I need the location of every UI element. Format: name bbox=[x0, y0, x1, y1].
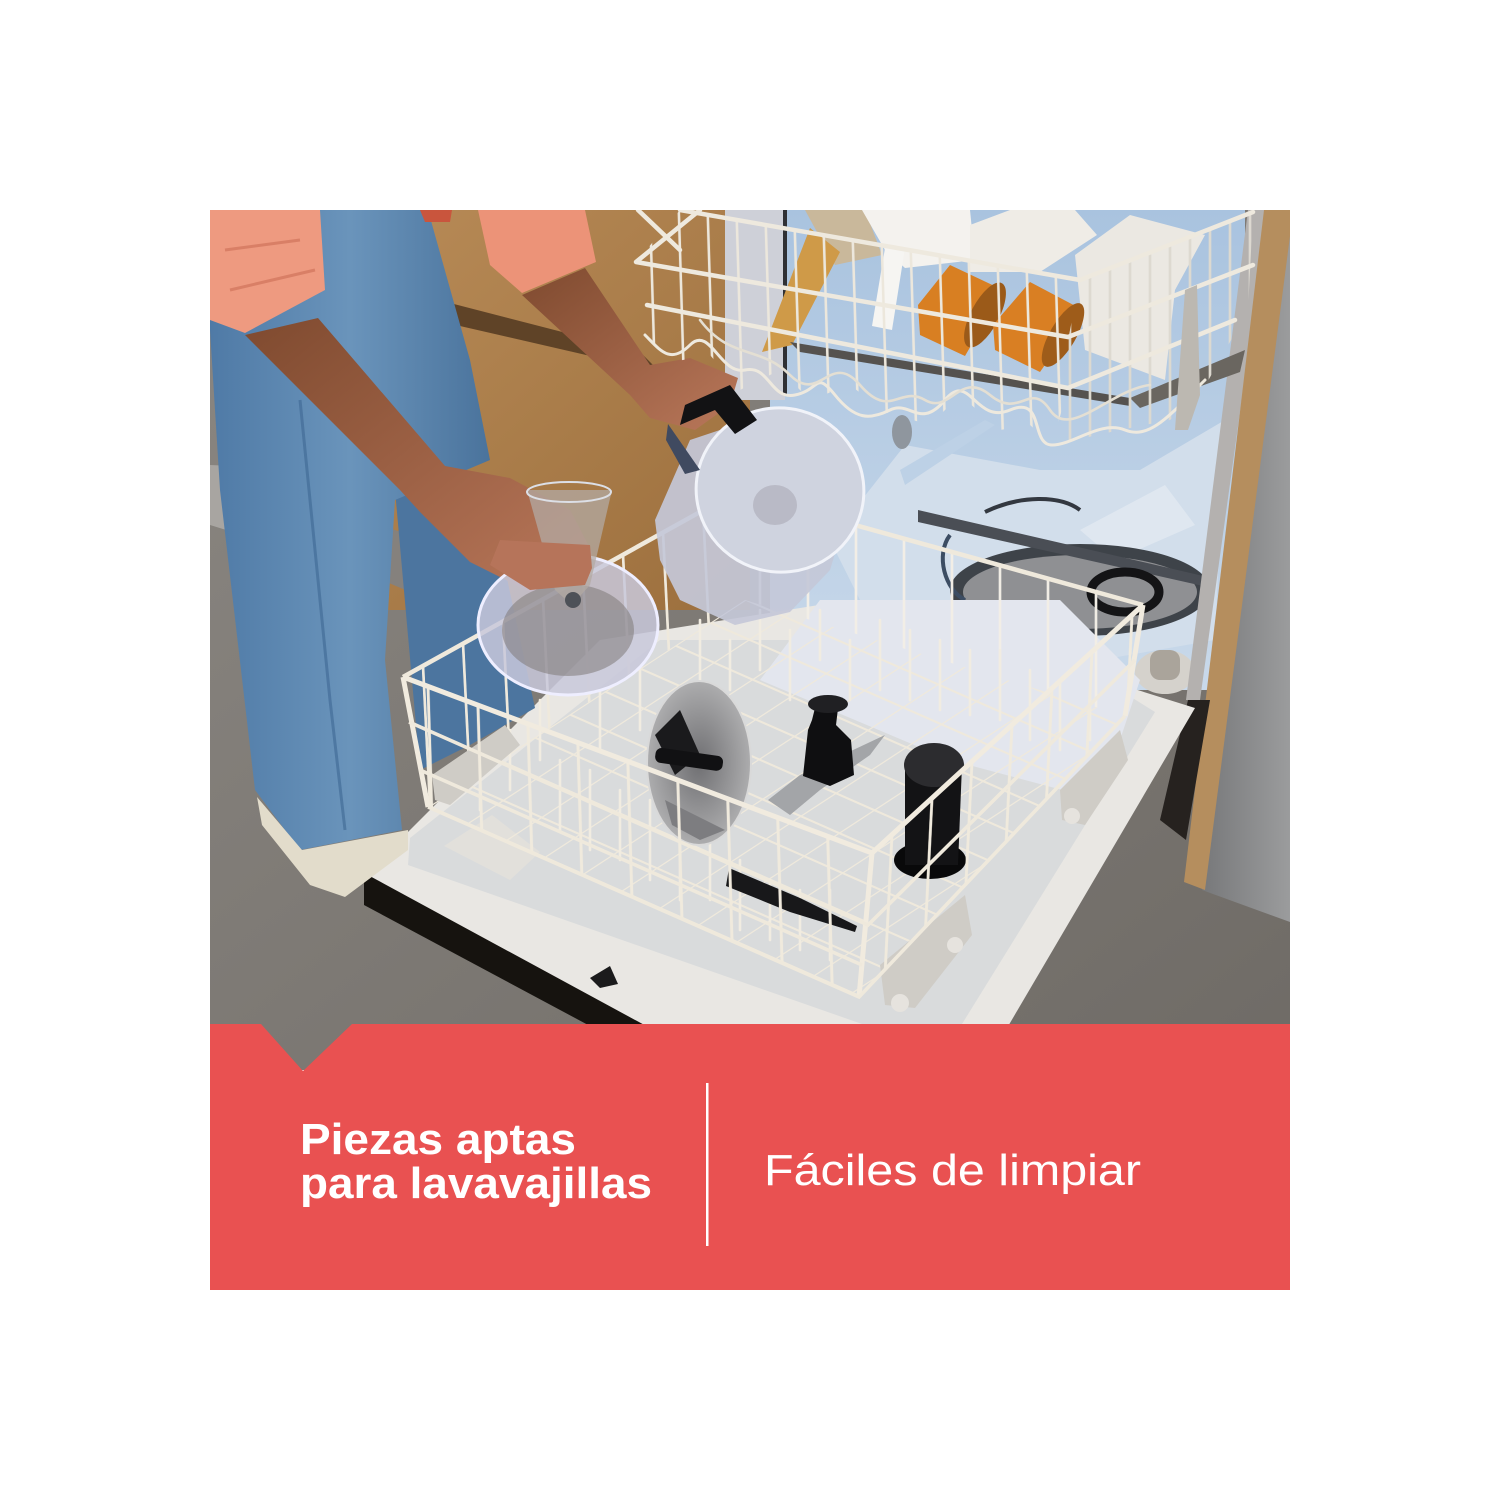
right side: frame, wood trim and stainless appliance bbox=[1160, 210, 1290, 922]
door lower black edge bbox=[364, 877, 642, 1024]
shoe bbox=[257, 797, 408, 897]
red caption band bbox=[210, 1024, 1290, 1290]
left arm bbox=[245, 318, 542, 580]
wall and baseboard bbox=[210, 465, 224, 530]
vertical divider bbox=[706, 1083, 708, 1246]
shirt sleeves bbox=[210, 210, 596, 333]
upper rack contents bbox=[762, 210, 1245, 408]
lower rack: back panels, floor and tines bbox=[403, 492, 1143, 997]
filter and spray arm bbox=[918, 499, 1212, 694]
rack wheels bbox=[432, 725, 1128, 1012]
heading: dishwasher safe parts: Piezas aptas bbox=[300, 1115, 576, 1164]
photo: woman loading dishwasher bbox=[210, 210, 1290, 1070]
heading: dishwasher safe parts: para lavavajillas bbox=[300, 1159, 652, 1208]
black pusher cylinder bbox=[894, 743, 966, 879]
dishwasher tub interior bbox=[725, 210, 1245, 690]
black stick accessory bbox=[726, 868, 857, 932]
right arm bbox=[522, 268, 738, 430]
subheading: easy to clean: Fáciles de limpiar bbox=[764, 1146, 1141, 1195]
lid bowl on the left bbox=[478, 482, 658, 695]
shredding disc bbox=[647, 681, 751, 845]
jeans bbox=[210, 210, 535, 850]
heading: dishwasher safe parts bbox=[300, 1115, 652, 1208]
wooden cabinet bbox=[388, 210, 750, 610]
fingers over cup bbox=[490, 540, 592, 590]
dishwasher door bbox=[366, 600, 1195, 1040]
front rack panels and rails bbox=[403, 605, 1143, 997]
chopping blade bbox=[768, 695, 885, 815]
orange ramekins bbox=[918, 265, 1092, 373]
work bowl bbox=[655, 385, 882, 625]
upper dish rack bbox=[636, 210, 1253, 445]
